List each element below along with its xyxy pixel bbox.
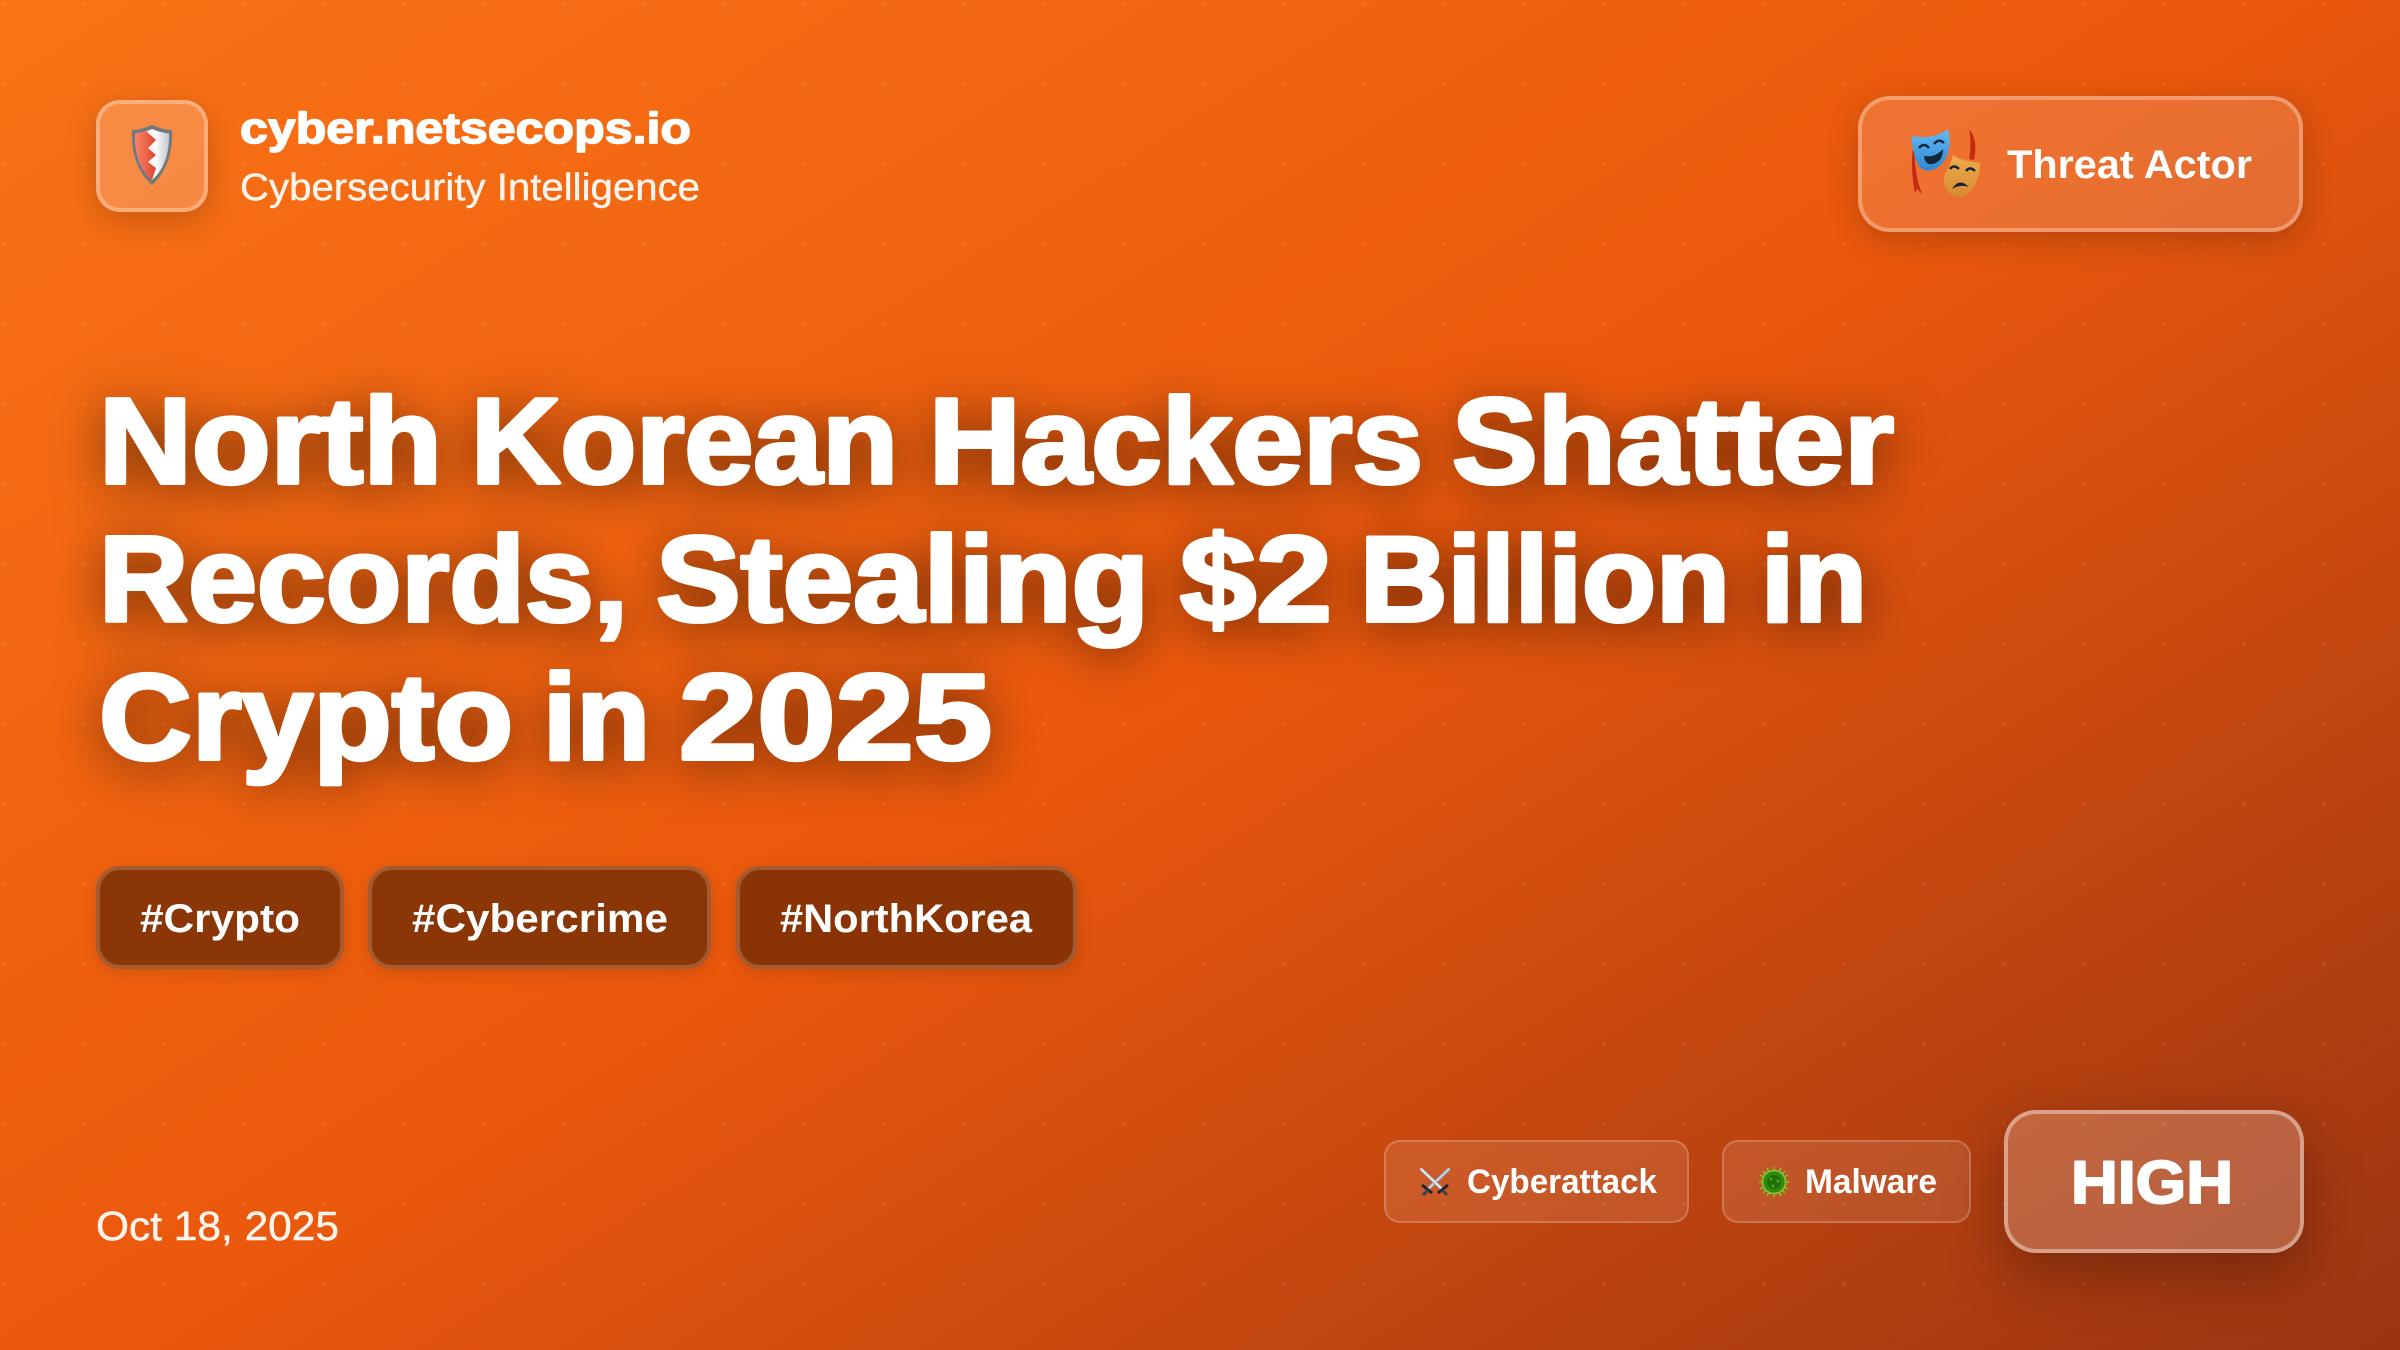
title: Crypto [99,649,513,785]
icon: shield [132,125,172,185]
severity badge [2004,1110,2304,1253]
tag: Crypto: #Crypto [140,897,300,941]
date: Oct 18, 2025 [96,1203,339,1249]
icon: crossed swords [1420,1168,1450,1196]
tag: Cybercrime [368,866,711,969]
tag: Cybercrime: #Cybercrime [412,897,668,941]
title: Korean [471,373,898,509]
title: Hackers [929,373,1423,509]
brand text [240,104,700,209]
title: Shatter [1452,373,1894,509]
title: Stealing [656,511,1149,647]
badge label: Threat Actor [2007,143,2252,187]
tag: NorthKorea [736,866,1077,969]
tag: Malware [1722,1140,1971,1223]
title: 2025 [679,649,992,785]
label: Cyberattack [1467,1163,1657,1201]
title: Records, [99,511,628,647]
title: in [1761,511,1867,647]
title: $2 [1180,511,1332,647]
tag: Cyberattack [1384,1140,1689,1223]
title: Billion [1360,511,1730,647]
logo badge [96,100,208,212]
site name: cyber.netsecops.io [240,104,691,153]
tag: NorthKorea: #NorthKorea [780,897,1033,941]
title: North [99,373,442,509]
tag: Crypto [96,866,344,969]
icon: theatre masks [1912,129,1980,197]
icon: microbe [1759,1167,1789,1197]
title: in [543,649,650,785]
tagline: Cybersecurity Intelligence [240,167,700,209]
label: Malware [1805,1163,1937,1201]
title [71,373,1914,818]
category badge: threat actor [1858,96,2303,232]
severity label: HIGH [2071,1149,2233,1216]
tag row [92,866,1080,978]
